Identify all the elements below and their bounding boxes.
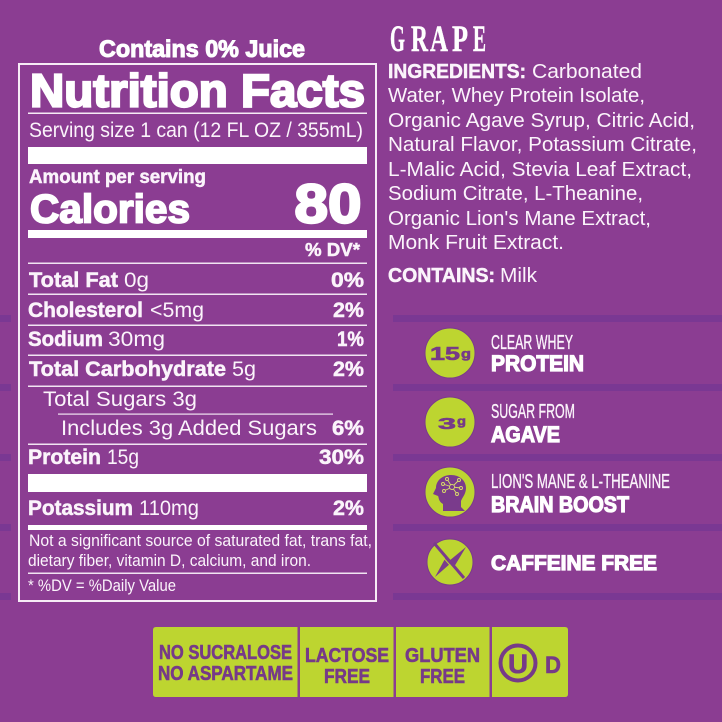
flavor title: P — [452, 19, 468, 60]
calories label: Calories — [30, 188, 190, 232]
flavor title: G — [390, 19, 405, 60]
ingredients list: Sodium Citrate, L-Theanine, — [388, 182, 643, 205]
benefit: clear whey protein: CLEAR WHEY — [491, 332, 573, 354]
serving size: Serving size 1 can (12 FL OZ / 355mL) — [29, 119, 363, 142]
badge: no sucralose no aspartame: NO ASPARTAME — [158, 663, 293, 685]
ingredients list: INGREDIENTS: — [388, 60, 526, 83]
row: added sugars: Includes 3g Added Sugars — [61, 417, 317, 440]
icon: 15g protein: g — [461, 346, 471, 361]
allergen statement: Milk — [500, 264, 538, 287]
flavor title: R — [411, 19, 429, 60]
icon: 15g protein — [425, 328, 475, 378]
ingredients list: Organic Lion's Mane Extract, — [388, 207, 651, 230]
badge: kosher dairy: D — [545, 652, 561, 679]
row: cholesterol — [28, 299, 364, 322]
badge: no sucralose no aspartame: NO SUCRALOSE — [159, 642, 292, 664]
row: total carbohydrate — [29, 358, 364, 381]
calories value: 80 — [294, 172, 362, 234]
row: cholesterol: 2% — [333, 299, 364, 322]
badge: kosher dairy: U — [508, 649, 528, 679]
nutrition facts title: Nutrition Facts — [30, 64, 365, 116]
ingredients list: Natural Flavor, Potassium Citrate, — [388, 133, 697, 156]
row: potassium — [28, 497, 364, 520]
benefit: brain boost: BRAIN BOOST — [491, 492, 630, 517]
icon: 3g sugar — [425, 397, 475, 447]
row: protein: Protein — [28, 446, 101, 469]
amount per serving: Amount per serving — [29, 167, 206, 188]
row: sodium — [28, 328, 364, 351]
icon: caffeine free — [427, 539, 473, 585]
row: cholesterol: Cholesterol — [28, 299, 143, 322]
daily value note: * %DV = %Daily Value — [28, 577, 176, 595]
footnote — [28, 531, 372, 570]
badge: no sucralose no aspartame — [153, 627, 298, 697]
footnote: Not a significant source of saturated fat, trans fat, — [29, 531, 372, 550]
footnote: dietary fiber, vitamin D, calcium, and iron. — [28, 551, 311, 570]
benefit: brain boost — [491, 471, 670, 517]
icon: brain boost — [425, 467, 475, 517]
badge: lactose free: LACTOSE — [305, 645, 389, 667]
allergen statement: CONTAINS: — [388, 264, 495, 287]
row: protein: 30% — [319, 446, 364, 469]
ingredients list: L-Malic Acid, Stevia Leaf Extract, — [388, 158, 692, 181]
row: total carbohydrate: 2% — [333, 358, 364, 381]
ingredients list — [388, 60, 697, 254]
benefit: sugar from agave: AGAVE — [491, 422, 560, 447]
row: protein — [28, 446, 364, 469]
badge: gluten free: GLUTEN — [405, 645, 480, 667]
flavor title — [390, 19, 486, 60]
row: sodium: 1% — [337, 328, 364, 351]
badge: gluten free — [396, 627, 490, 697]
daily value header: % DV* — [305, 240, 360, 260]
panel: nutrition facts — [19, 64, 376, 601]
row: protein: 15g — [107, 446, 139, 469]
icon: 3g sugar: g — [457, 414, 466, 428]
row: total carbohydrate: Total Carbohydrate — [29, 358, 226, 381]
badge: lactose free: FREE — [324, 666, 370, 688]
ingredients list: Monk Fruit Extract. — [388, 231, 564, 254]
icon: 3g sugar: 3 — [438, 416, 456, 433]
row: total fat: 0g — [124, 269, 149, 292]
benefit: caffeine free: CAFFEINE FREE — [491, 552, 657, 575]
ingredients list: Carbonated — [532, 60, 642, 83]
row: potassium: Potassium — [28, 497, 133, 520]
badge: gluten free: FREE — [420, 666, 465, 688]
icon: 15g protein: 15 — [430, 344, 460, 364]
row: cholesterol: <5mg — [150, 299, 204, 322]
row: total sugars: Total Sugars 3g — [43, 388, 197, 411]
row: added sugars: 6% — [332, 417, 364, 440]
flavor title: E — [473, 19, 486, 60]
row: total carbohydrate: 5g — [232, 358, 256, 381]
flavor title: A — [430, 19, 448, 60]
row: total fat — [29, 269, 364, 292]
ingredients list: Water, Whey Protein Isolate, — [388, 84, 645, 107]
benefit: clear whey protein: PROTEIN — [491, 351, 584, 376]
benefit: sugar from agave — [491, 401, 575, 447]
row: sodium: 30mg — [108, 328, 165, 351]
ingredients list: Organic Agave Syrup, Citric Acid, — [388, 109, 695, 132]
row: potassium: 110mg — [139, 497, 199, 520]
benefit: clear whey protein — [491, 332, 584, 376]
badge strip — [153, 627, 568, 697]
row: potassium: 2% — [333, 497, 364, 520]
badge: lactose free — [300, 627, 394, 697]
benefit: sugar from agave: SUGAR FROM — [491, 401, 575, 423]
heading: contains 0% juice: Contains 0% Juice — [99, 36, 305, 63]
row: sodium: Sodium — [28, 328, 103, 351]
badge: kosher dairy — [492, 627, 568, 697]
row: total fat: 0% — [331, 269, 364, 292]
row: total fat: Total Fat — [29, 269, 118, 292]
